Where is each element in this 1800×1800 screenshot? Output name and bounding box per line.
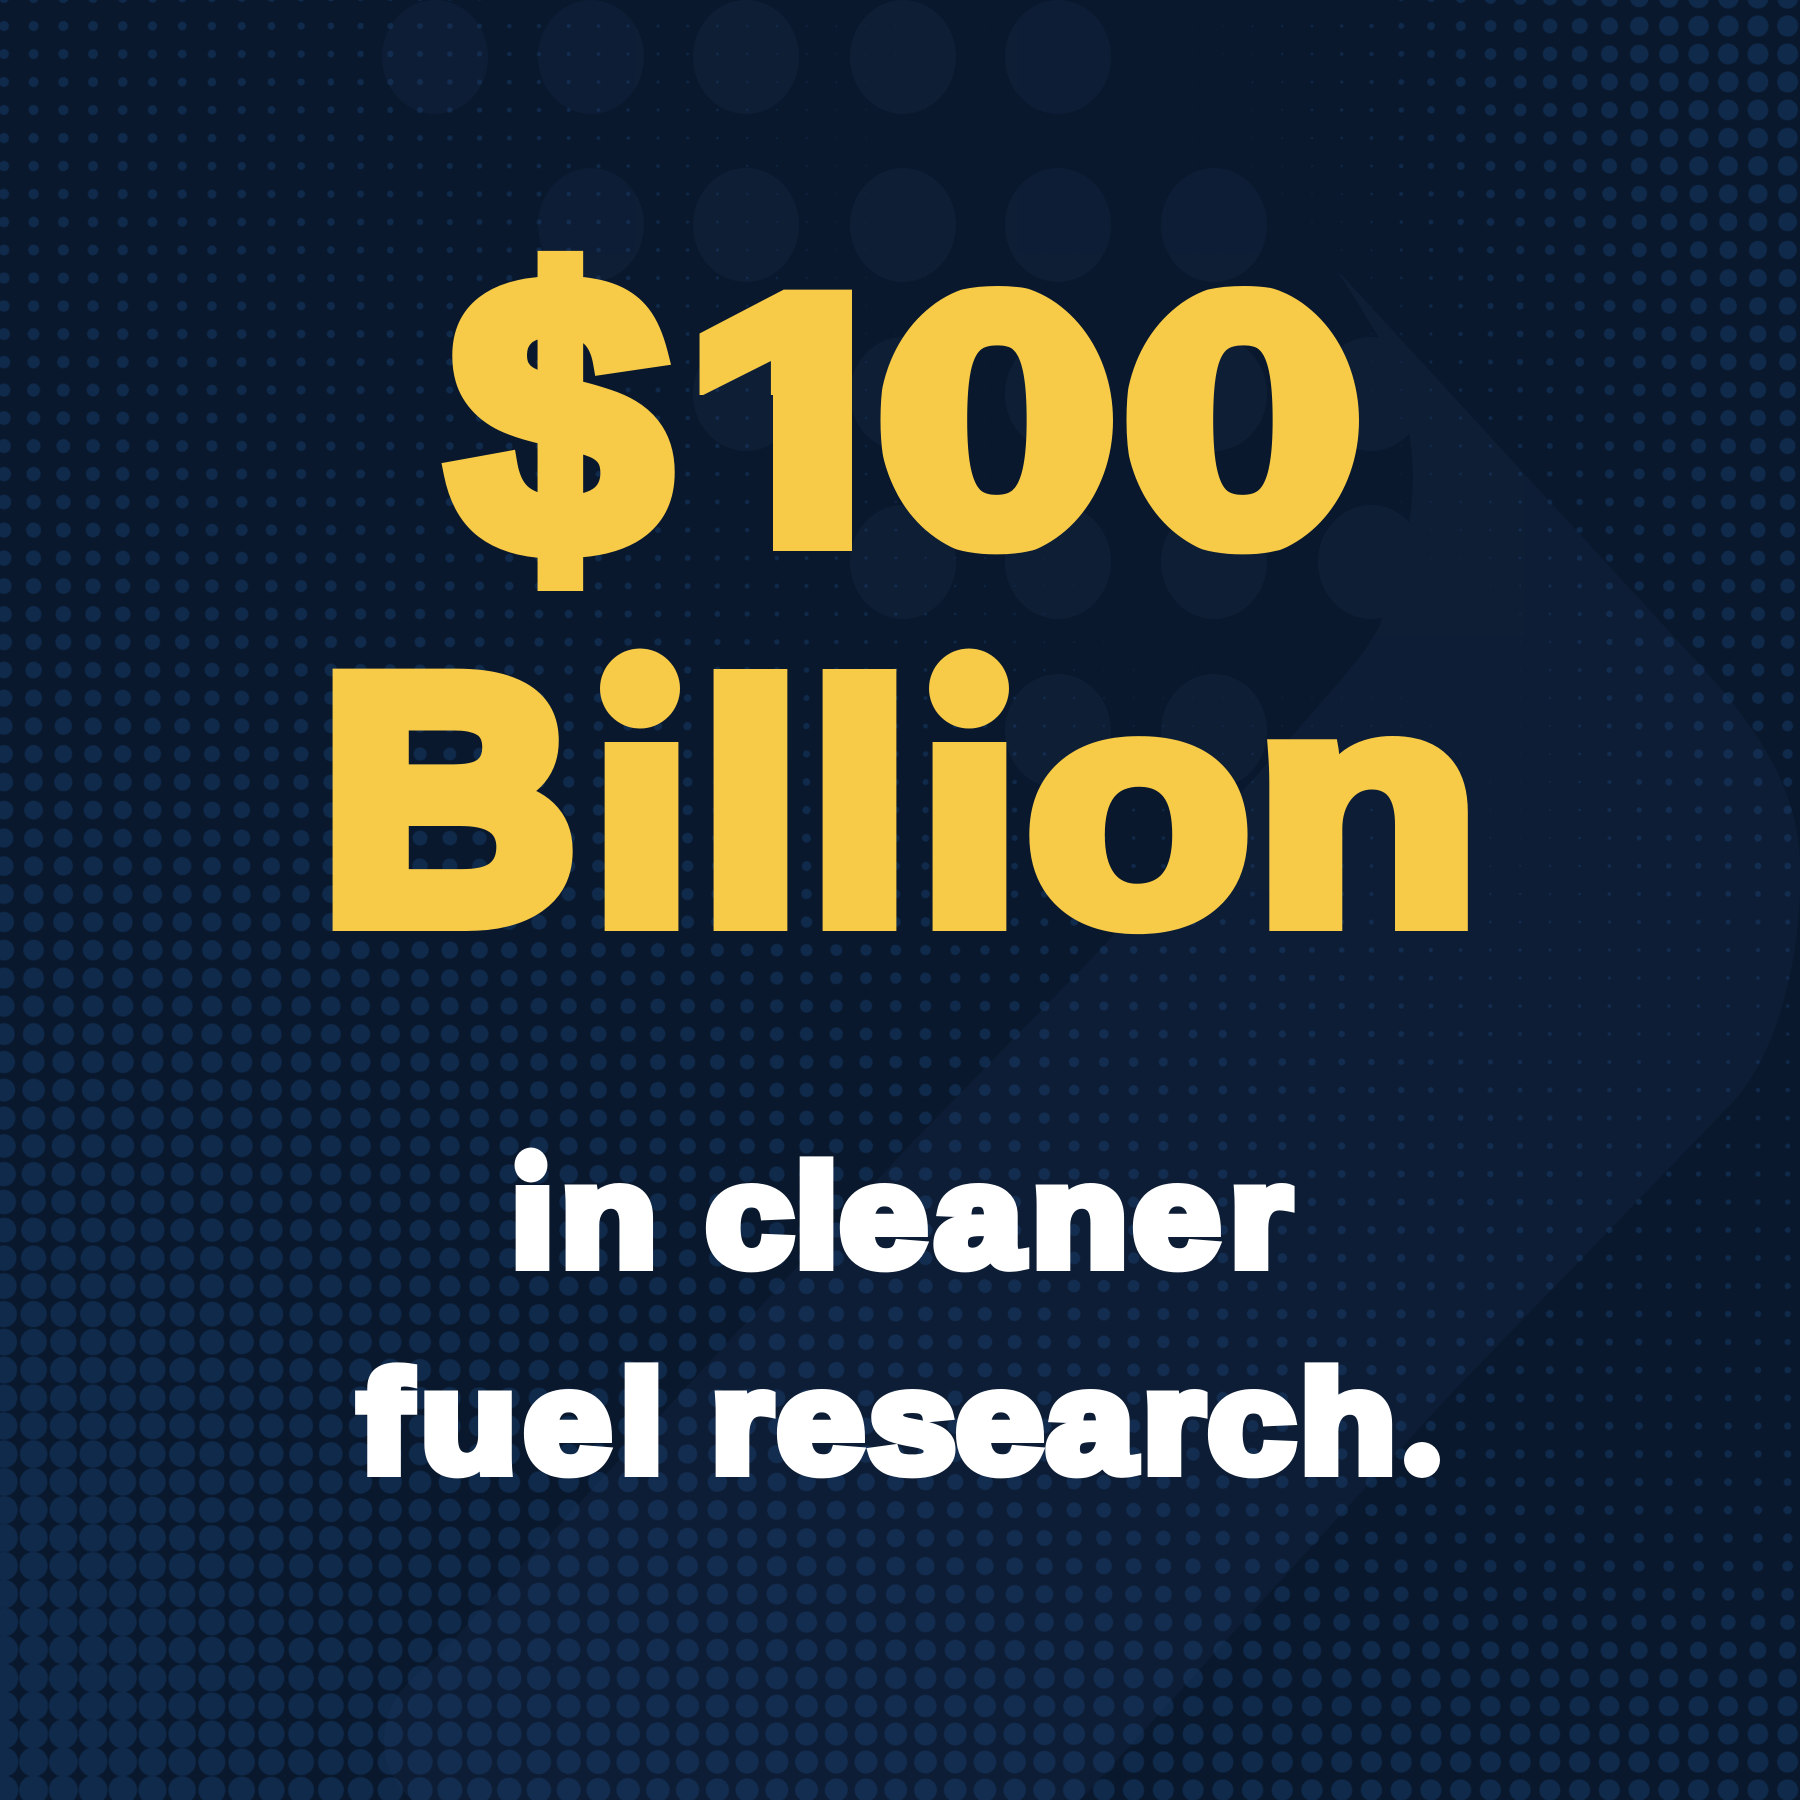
headline: Billion: on <box>1026 628 1479 990</box>
headline: Billion: Billi <box>322 607 1019 992</box>
headline: Billion <box>332 648 1468 934</box>
subheading: fuel research.: fuel research. <box>358 1342 1443 1502</box>
headline: $100: 100 <box>684 226 1364 614</box>
translucent rounded diamond shape and faint circles <box>382 0 1800 1800</box>
headline: $100 <box>451 202 1364 633</box>
headline: $100: $ <box>451 202 668 633</box>
subheading: in cleaner: in cleaner <box>511 1136 1291 1296</box>
